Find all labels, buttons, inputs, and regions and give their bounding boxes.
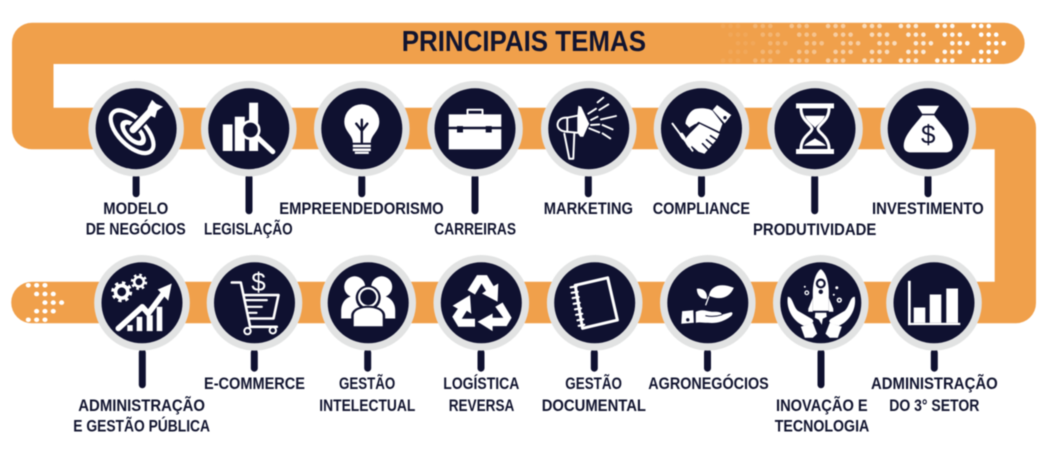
label: ADMINISTRAÇÃO bbox=[78, 395, 205, 415]
label: AGRONEGÓCIOS bbox=[648, 374, 769, 393]
stem bbox=[704, 349, 711, 372]
icon: money bag: $ bbox=[921, 119, 936, 149]
stem bbox=[358, 174, 365, 197]
topic: legislação bbox=[204, 85, 293, 238]
icon: target with arrow bbox=[103, 100, 163, 160]
icon: megaphone bbox=[558, 98, 616, 159]
icon: briefcase bbox=[449, 110, 501, 149]
stem bbox=[811, 174, 818, 214]
topic: administração do 3º setor bbox=[871, 259, 998, 415]
label bbox=[775, 395, 869, 436]
label: DO 3° SETOR bbox=[889, 396, 979, 415]
topic: inovação e tecnologia bbox=[775, 259, 869, 436]
circle bbox=[545, 85, 633, 173]
circle bbox=[205, 85, 293, 173]
label: DOCUMENTAL bbox=[542, 396, 646, 415]
topic: modelo de negócios bbox=[86, 85, 186, 238]
label: GESTÃO bbox=[339, 373, 395, 393]
orange serpentine path bbox=[11, 23, 1036, 323]
label: E-COMMERCE bbox=[204, 374, 305, 393]
icon: recycle arrows bbox=[452, 275, 512, 331]
topic: e-commerce bbox=[204, 259, 305, 393]
label: INOVAÇÃO E bbox=[776, 395, 868, 415]
label: LEGISLAÇÃO bbox=[204, 218, 293, 238]
circle bbox=[210, 259, 299, 347]
circle bbox=[657, 85, 746, 173]
circle bbox=[431, 85, 519, 173]
icon: hourglass bbox=[796, 103, 834, 154]
label: INVESTIMENTO bbox=[872, 199, 984, 218]
circle bbox=[884, 85, 972, 173]
label: DE NEGÓCIOS bbox=[86, 219, 186, 238]
stem bbox=[139, 349, 146, 388]
circle bbox=[437, 259, 525, 347]
topic: empreendedorismo bbox=[279, 85, 444, 218]
label: EMPREENDEDORISMO bbox=[279, 199, 444, 218]
stem bbox=[472, 174, 478, 214]
stem bbox=[133, 174, 140, 197]
label bbox=[73, 395, 210, 436]
right hand bbox=[826, 297, 855, 338]
icon: light bulb bbox=[344, 104, 379, 154]
label: PRODUTIVIDADE bbox=[753, 220, 876, 239]
label: LOGÍSTICA bbox=[443, 374, 519, 393]
label: INTELECTUAL bbox=[319, 396, 415, 415]
topic: marketing bbox=[544, 85, 633, 218]
label: TECNOLOGIA bbox=[775, 417, 869, 436]
left hand bbox=[787, 297, 817, 338]
stem bbox=[924, 174, 932, 197]
circle bbox=[664, 259, 752, 347]
stem bbox=[818, 349, 824, 388]
circle bbox=[890, 259, 978, 347]
circle bbox=[98, 259, 186, 347]
stem bbox=[251, 349, 258, 372]
icon: rocket between hands bbox=[787, 269, 855, 338]
dotted chevron: bottom bar start bbox=[26, 283, 64, 322]
icon: shopping cart: $ bbox=[251, 267, 266, 297]
icon: hand holding plant bbox=[681, 285, 734, 324]
label: GESTÃO bbox=[565, 373, 622, 393]
circle bbox=[777, 259, 865, 347]
label: MARKETING bbox=[544, 199, 633, 218]
label: MODELO bbox=[103, 199, 168, 218]
icon: handshake bbox=[672, 105, 731, 154]
icon: group of people bbox=[341, 276, 395, 327]
topic: agronegócios bbox=[648, 259, 769, 393]
stem bbox=[246, 174, 252, 214]
stem bbox=[931, 349, 938, 372]
topic: gestão intelectual bbox=[319, 259, 415, 415]
topic: gestão documental bbox=[542, 259, 646, 415]
stem bbox=[478, 349, 484, 372]
label: CARREIRAS bbox=[434, 219, 516, 238]
topic: produtividade bbox=[753, 85, 876, 239]
circle bbox=[324, 259, 412, 347]
label: REVERSA bbox=[449, 396, 514, 415]
stem bbox=[591, 349, 598, 372]
title: PRINCIPAIS TEMAS bbox=[402, 26, 646, 58]
label bbox=[319, 373, 415, 415]
topic: investimento bbox=[872, 85, 984, 218]
label bbox=[871, 373, 998, 415]
stem bbox=[698, 174, 705, 197]
label: COMPLIANCE bbox=[653, 199, 750, 218]
circle bbox=[551, 259, 639, 347]
dotted chevrons: top bar bbox=[721, 24, 1006, 63]
icon: bar chart bbox=[908, 281, 960, 325]
label: ADMINISTRAÇÃO bbox=[871, 373, 998, 393]
label bbox=[86, 199, 186, 238]
stem bbox=[364, 349, 371, 372]
circle bbox=[92, 85, 180, 173]
label bbox=[443, 374, 519, 415]
topic: administração e gestão pública bbox=[73, 259, 210, 436]
topic: logística reversa bbox=[437, 259, 525, 415]
topic: carreiras bbox=[431, 85, 519, 238]
stem bbox=[585, 174, 592, 197]
label: E GESTÃO PÚBLICA bbox=[73, 416, 210, 436]
circle bbox=[318, 85, 406, 173]
icon: spiral notebook bbox=[571, 278, 617, 328]
circle bbox=[771, 85, 859, 173]
label bbox=[542, 373, 646, 415]
topic: compliance bbox=[653, 85, 750, 218]
icon: gears and growth arrow bbox=[113, 275, 172, 331]
icon: bars with magnifier bbox=[223, 103, 273, 152]
